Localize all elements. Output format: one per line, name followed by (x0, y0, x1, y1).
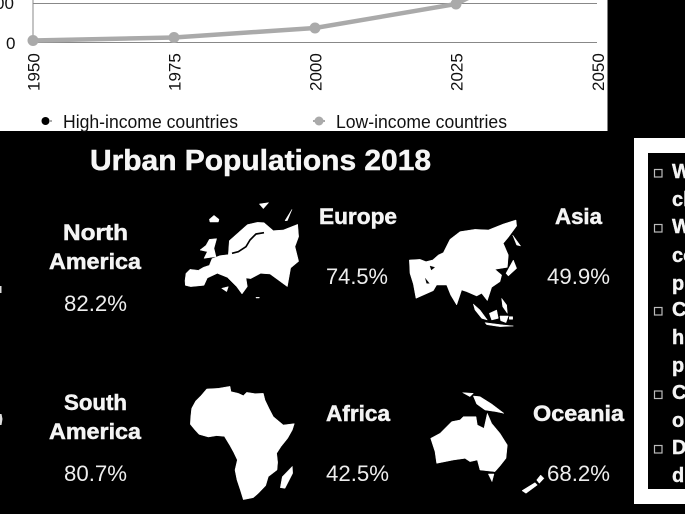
North America label: North (63, 220, 128, 245)
bullet text: p (672, 355, 684, 377)
y axis labels (0, 0, 15, 53)
South America label: 80.7% (64, 461, 127, 486)
Africa label: 42.5% (326, 461, 389, 486)
Asia label (547, 204, 610, 289)
Europe label: 74.5% (326, 264, 388, 289)
bullet text: p (672, 273, 684, 295)
North America label: America (49, 249, 142, 274)
Oceania label (533, 401, 625, 486)
icon: Asia map (409, 220, 521, 327)
x axis labels: 2025 (448, 53, 466, 91)
icon: Oceania map (431, 393, 544, 493)
x axis labels (24, 53, 608, 91)
y axis labels: 0 (6, 34, 15, 53)
South America label: America (49, 419, 142, 444)
x axis labels: 2000 (306, 53, 326, 91)
icon: Europe map (185, 203, 299, 298)
Asia label: Asia (555, 204, 603, 229)
Africa label: Africa (326, 401, 391, 426)
South America label: South (64, 390, 127, 415)
Africa label (326, 401, 391, 486)
North America label: 82.2% (64, 291, 127, 316)
Oceania label: Oceania (533, 401, 625, 426)
bullet text: o (672, 410, 684, 432)
cropped left-edge fragments (0, 286, 2, 425)
Europe label: Europe (319, 204, 397, 229)
bullet text: h (672, 327, 684, 349)
bullet text: d (672, 465, 684, 487)
bullet markers (654, 170, 662, 453)
legend: high-income: High-income countries (63, 112, 238, 132)
icon: Africa map (190, 386, 294, 500)
North America label (49, 220, 142, 316)
South America label (49, 390, 142, 486)
legend: low-income: Low-income countries (336, 112, 507, 132)
Oceania label: 68.2% (547, 461, 610, 486)
panel: line chart (0, 0, 608, 132)
Europe label (319, 204, 397, 289)
Asia label: 49.9% (547, 264, 610, 289)
panel: cropped bullet list (634, 138, 685, 504)
x axis labels: 1950 (24, 53, 44, 91)
title: Urban Populations 2018 (90, 145, 431, 177)
bullet text (672, 161, 685, 487)
low-income line (28, 0, 472, 46)
x axis labels: 1975 (166, 53, 184, 91)
x axis labels: 2050 (589, 53, 608, 91)
